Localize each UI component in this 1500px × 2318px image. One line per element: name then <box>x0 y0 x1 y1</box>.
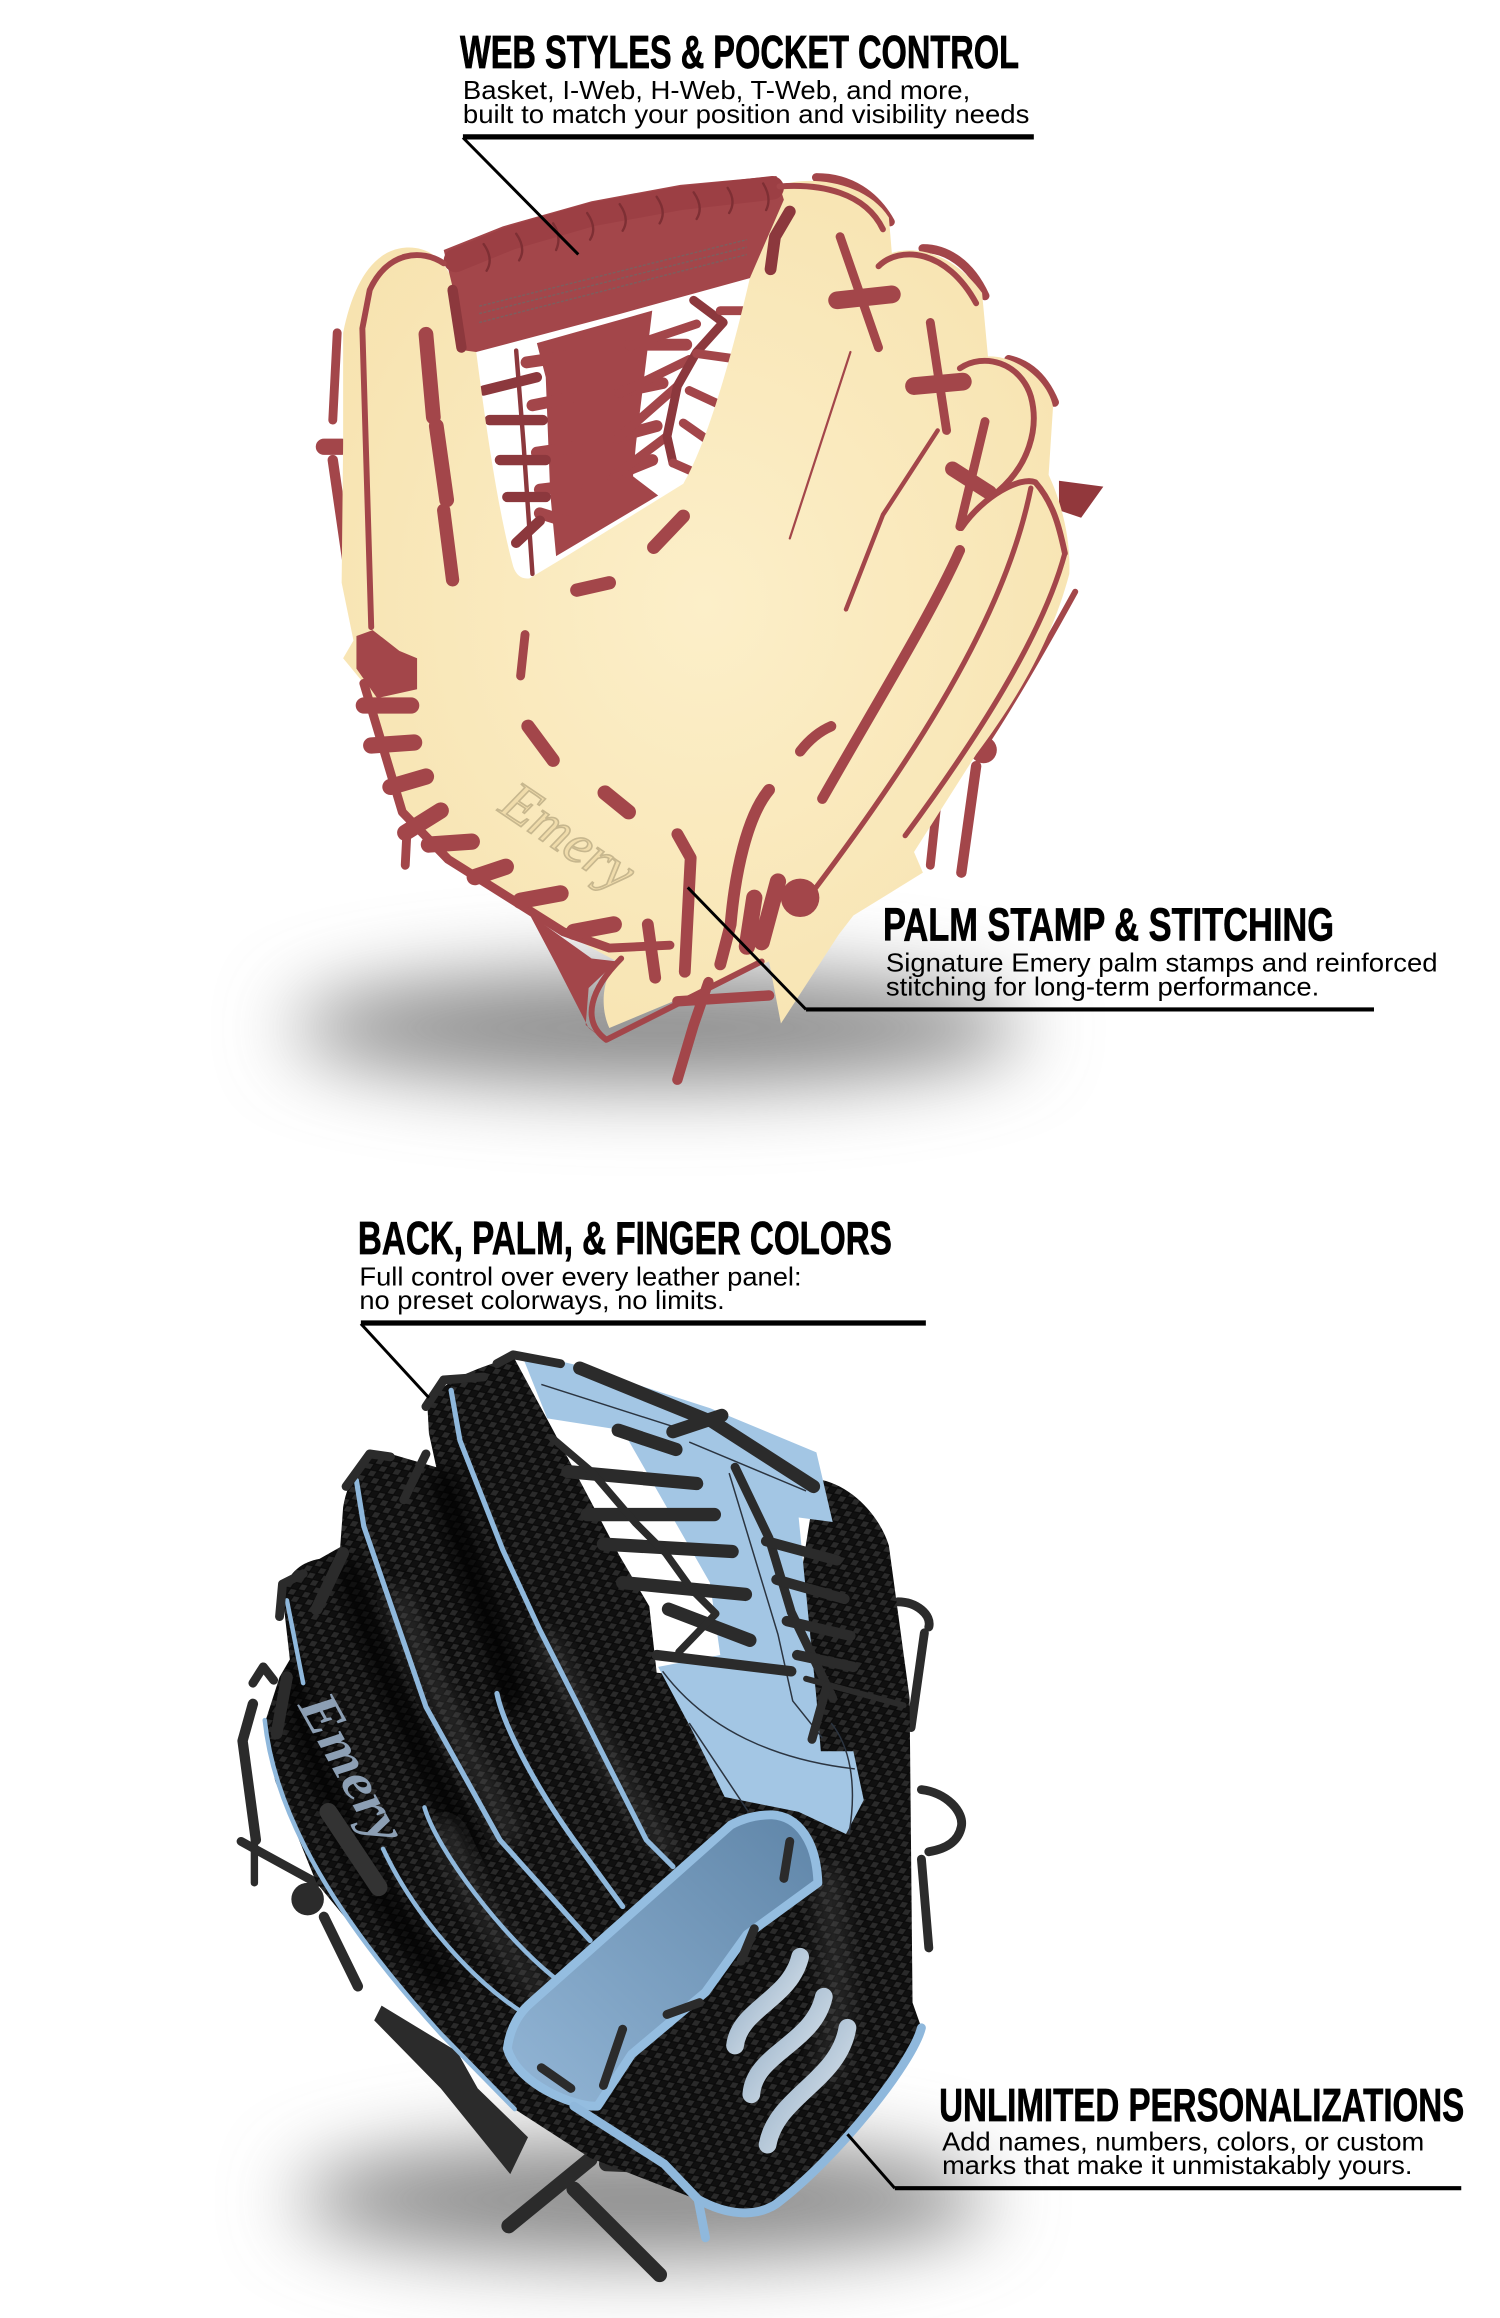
light blue web and palm panel <box>521 1352 864 1834</box>
web: central strip <box>537 311 658 556</box>
web: left lacing <box>484 351 583 574</box>
heading: WEB STYLES & POCKET CONTROL <box>460 26 1019 78</box>
leather shading <box>288 1479 837 2071</box>
body text: no preset colorways, no limits. <box>359 1287 725 1315</box>
heading: PALM STAMP & STITCHING <box>883 899 1334 951</box>
body text: Add names, numbers, colors, or custom <box>942 2129 1424 2157</box>
shadow under top glove <box>291 972 1025 1084</box>
callout: leather colors <box>358 1212 926 1398</box>
palm stamp: Emery: Emery <box>489 769 647 904</box>
glove: black back with light blue web <box>241 1352 962 2275</box>
strap stitch marks <box>541 1841 790 2088</box>
shadow under bottom glove <box>296 2140 991 2258</box>
blue binding <box>574 2028 921 2238</box>
body text <box>359 1263 802 1315</box>
thumb stitching <box>362 255 453 627</box>
leader line <box>688 887 1374 1009</box>
back leather with snake texture <box>265 1356 921 2213</box>
leader line <box>847 2134 1461 2188</box>
body text <box>942 2129 1424 2180</box>
web lacing <box>552 1368 904 1739</box>
body text: Full control over every leather panel: <box>359 1263 802 1291</box>
back seam lines <box>265 1390 673 2109</box>
palm stitch dashes <box>521 516 691 972</box>
callout: personalizations <box>847 2079 1464 2188</box>
leader line <box>361 1323 926 1398</box>
callout: palm stamp <box>688 887 1438 1009</box>
body text: built to match your position and visibility needs <box>463 101 1029 129</box>
body text: marks that make it unmistakably yours. <box>942 2152 1412 2180</box>
outer back laces <box>324 178 1103 873</box>
panel stitching <box>541 1384 855 1834</box>
web: right lacing <box>612 300 750 476</box>
heading: BACK, PALM, & FINGER COLORS <box>358 1212 892 1264</box>
body text <box>463 77 1029 129</box>
wordmark: Emery: Emery <box>286 1681 419 1854</box>
leader line <box>463 137 1034 254</box>
wrist strap <box>507 1815 818 2106</box>
palm leather <box>342 181 1069 1028</box>
finger tip laces <box>277 1355 561 1887</box>
web: header band <box>444 176 790 352</box>
outer laces <box>241 1602 962 2275</box>
wrist stripes <box>735 1957 847 2145</box>
callout: web styles <box>460 26 1034 254</box>
body text: Signature Emery palm stamps and reinforced <box>886 950 1438 978</box>
body text <box>886 950 1438 1001</box>
body text: Basket, I-Web, H-Web, T-Web, and more, <box>463 77 970 105</box>
finger laces and seams <box>720 186 1065 964</box>
heel lacing <box>356 630 819 1080</box>
glove: cream palm with maroon lacing <box>324 176 1103 1080</box>
body text: stitching for long-term performance. <box>886 973 1319 1001</box>
